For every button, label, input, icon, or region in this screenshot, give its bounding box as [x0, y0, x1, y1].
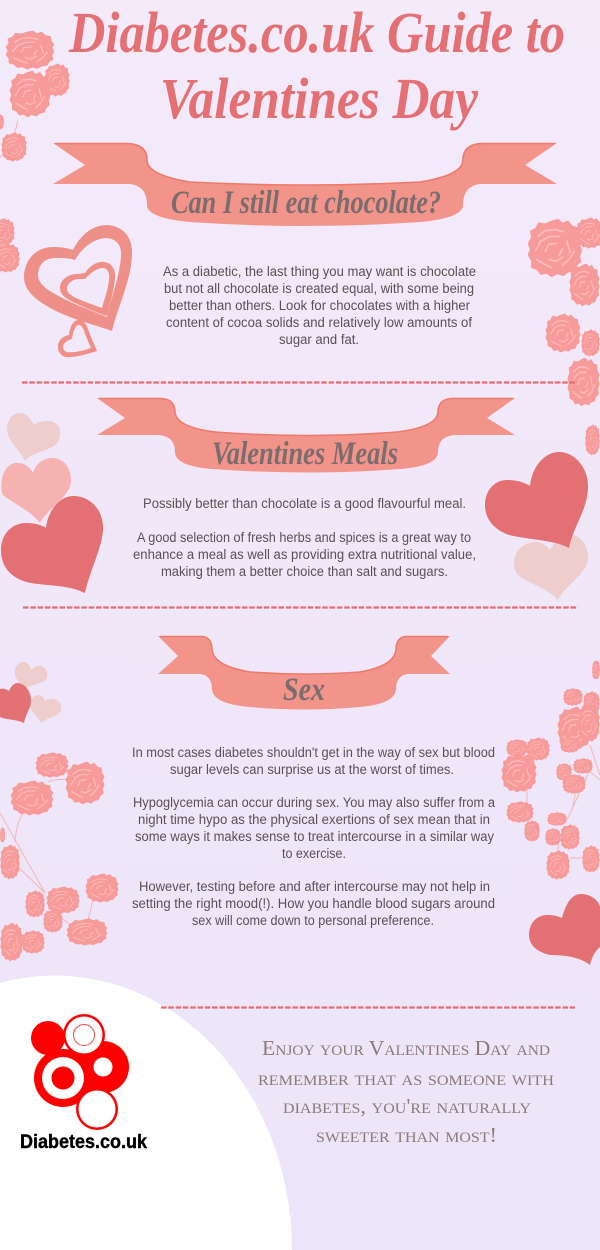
ribbon: can I still eat chocolate	[53, 143, 557, 226]
text: sex: some ways it makes sense to treat intercourse in a similar way	[135, 829, 494, 844]
text: meals	[133, 496, 476, 579]
flowers: top left	[0, 31, 69, 161]
hearts: left group	[1, 413, 103, 593]
text: chocolate: but not all chocolate is created equal, with some being	[164, 281, 474, 296]
text: sex: In most cases diabetes shouldn't get in the way of sex but blood	[132, 745, 495, 760]
flowers: left middle	[0, 219, 19, 272]
text: sex	[132, 745, 495, 928]
text: sex: Hypoglycemia can occur during sex. You may also suffer from a	[133, 795, 495, 810]
flowers: right upper	[529, 218, 600, 455]
closing message: sweeter than most!	[316, 1123, 497, 1147]
title	[68, 0, 565, 131]
text: chocolate	[163, 264, 476, 347]
hearts: small group	[0, 662, 61, 723]
text: meals: enhance a meal as well as providing extra nutritional value,	[133, 547, 476, 562]
text: sex: However, testing before and after intercourse may not help in	[139, 879, 490, 894]
text: sex: night time hypo as the physical exertions of sex mean that in	[138, 812, 490, 827]
heading: Sex	[283, 672, 325, 708]
logo mark	[31, 1014, 129, 1130]
text: sex: sex will come down to personal preference.	[192, 913, 434, 928]
text: chocolate: better than others. Look for chocolates with a higher	[169, 298, 470, 313]
flowers: section three right	[502, 661, 600, 879]
heading: Can I still eat chocolate?	[171, 185, 441, 221]
text: meals: Possibly better than chocolate is a good flavourful meal.	[143, 496, 466, 511]
logo	[20, 1014, 147, 1153]
text: chocolate: sugar and fat.	[279, 332, 359, 347]
hearts: right group	[485, 452, 588, 600]
text: meals: A good selection of fresh herbs and spices is a great way to	[137, 530, 471, 545]
logo wordmark: Diabetes.co.uk	[20, 1132, 147, 1153]
closing message: remember that as someone with	[258, 1066, 554, 1090]
flowers: section three left	[0, 753, 118, 961]
text: sex: sugar levels can surprise us at the worst of times.	[170, 762, 454, 777]
ribbon: sex	[158, 636, 450, 710]
ribbon: valentines meals	[97, 398, 515, 472]
heart: bottom right	[529, 894, 600, 965]
text: meals: making them a better choice than salt and sugars.	[161, 564, 448, 579]
title: Valentines Day	[160, 66, 478, 131]
text: sex: setting the right mood(!). How you handle blood sugars around	[132, 896, 495, 911]
closing message: Enjoy your Valentines Day and	[262, 1036, 550, 1060]
text: chocolate: As a diabetic, the last thing you may want is chocolate	[163, 264, 476, 279]
closing message	[258, 1036, 554, 1147]
text: chocolate: content of cocoa solids and relatively low amounts of	[166, 315, 472, 330]
white corner panel	[0, 975, 292, 1250]
text: sex: to exercise.	[282, 846, 346, 861]
heading: Valentines Meals	[212, 436, 398, 472]
closing message: diabetes, you're naturally	[283, 1094, 531, 1118]
icon: hollow hearts	[24, 225, 132, 357]
